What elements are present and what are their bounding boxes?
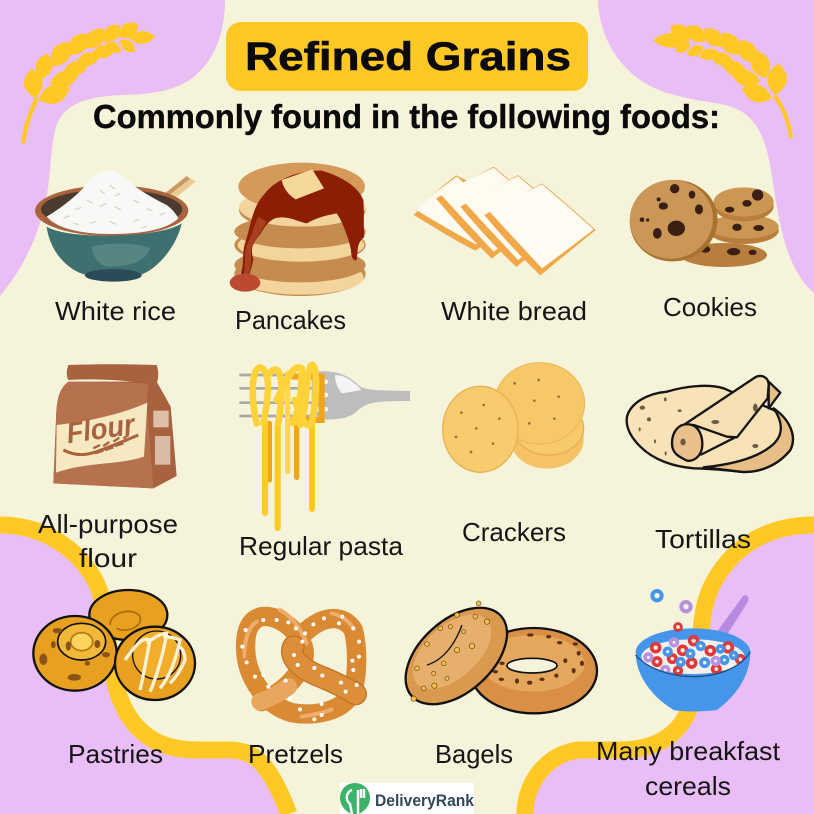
- label: Many breakfast cereals: cereals: [645, 771, 731, 801]
- label: All-purpose flour: flour: [79, 543, 137, 573]
- label: Crackers: Crackers: [462, 517, 566, 547]
- icon: white rice bowl: [35, 171, 196, 282]
- icon: left wheat ear: [22, 18, 156, 142]
- icon: pastries: [33, 590, 195, 700]
- panel: top-right purple corner: [598, 0, 814, 293]
- icon: white bread slices: [414, 167, 596, 275]
- icon: flour bag: Flour: [64, 408, 138, 450]
- label: Regular pasta: Regular pasta: [239, 531, 404, 561]
- title banner: Refined Grains: [245, 35, 571, 79]
- label: Many breakfast cereals: Many breakfast: [596, 736, 781, 766]
- title banner: [226, 22, 588, 91]
- label: All-purpose flour: All-purpose: [38, 509, 178, 539]
- panel: bottom-right purple corner with yellow border: [525, 525, 814, 814]
- icon: pasta on fork: [239, 365, 410, 528]
- icon: bagels: [388, 589, 597, 723]
- icon: cookies: [623, 173, 779, 268]
- label: Bagels: Bagels: [435, 739, 513, 769]
- label: Pancakes: Pancakes: [235, 305, 346, 335]
- label: White bread: White bread: [441, 296, 587, 326]
- icon: crackers: [443, 363, 585, 472]
- label: Cookies: Cookies: [663, 292, 757, 322]
- panel: bottom-left purple corner with yellow border: [0, 525, 289, 814]
- label: All-purpose flour: [38, 509, 178, 573]
- label: Pretzels: Pretzels: [248, 739, 343, 769]
- label: White rice: White rice: [55, 296, 176, 326]
- icon: right wheat ear: [653, 20, 791, 137]
- panel: top-left purple corner: [0, 0, 225, 296]
- label: Pastries: Pastries: [68, 739, 163, 769]
- logo: DeliveryRank: [340, 783, 474, 814]
- icon: pretzel: [240, 610, 361, 721]
- logo: DeliveryRank: DeliveryRank: [375, 791, 474, 810]
- icon: tortillas: [627, 376, 793, 472]
- label: Tortillas: Tortillas: [655, 524, 751, 554]
- label: Many breakfast cereals: [596, 736, 781, 801]
- icon: cereal bowl: [636, 591, 750, 711]
- icon: flour bag: [53, 364, 177, 488]
- icon: pancakes: [230, 163, 366, 296]
- subtitle: Commonly found in the following foods:: [93, 98, 720, 135]
